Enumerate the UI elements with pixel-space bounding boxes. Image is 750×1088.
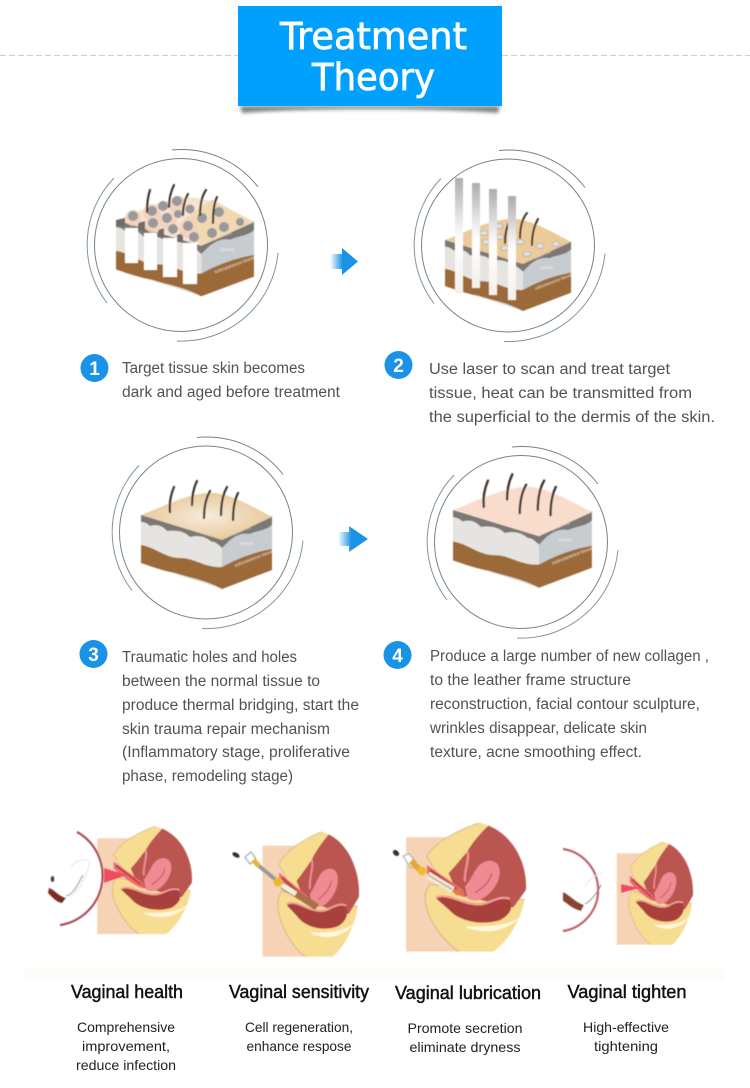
text: step 3 [122, 649, 359, 785]
icon: renewed skin block [453, 474, 594, 588]
illustration: vaginal tighten [563, 841, 694, 945]
badge: step 4: 4 [392, 646, 403, 667]
label: vaginal health: reduce infection [76, 1057, 176, 1073]
arrow: step 3 to step 4 [338, 526, 368, 552]
text: step 3: skin trauma repair mechanism [122, 721, 330, 738]
label: vaginal tighten [568, 982, 686, 1054]
panel: step 2 illustration [414, 150, 605, 342]
label: vaginal lubrication [395, 983, 541, 1055]
text: step 3: phase, remodeling stage) [122, 768, 293, 785]
badge: step 2 [384, 351, 412, 379]
label: vaginal health: improvement, [82, 1038, 170, 1054]
icon: skin block with laser beams [445, 178, 573, 311]
panel: step 4 illustration [427, 446, 618, 638]
title banner: Treatment [279, 15, 467, 58]
label: vaginal health [71, 982, 183, 1073]
text: step 1: dark and aged before treatment [122, 384, 341, 401]
text: step 2: the superficial to the dermis of the skin. [429, 409, 715, 426]
icon: magnifier lens [563, 849, 640, 931]
text: step 4: texture, acne smoothing effect. [430, 744, 642, 761]
label: vaginal health: Comprehensive [77, 1019, 175, 1035]
label: vaginal lubrication: Vaginal lubrication [395, 983, 541, 1003]
text: step 3: (Inflammatory stage, proliferative [122, 744, 350, 761]
illustration: vaginal sensitivity [231, 831, 361, 957]
text: step 4: reconstruction, facial contour sculpture, [430, 696, 700, 713]
text: step 3: produce thermal bridging, start the [122, 697, 359, 714]
label: vaginal lubrication: Promote secretion [408, 1020, 522, 1036]
label: vaginal health: Vaginal health [71, 982, 183, 1002]
badge: step 4 [384, 641, 412, 669]
icon: healing skin block [141, 481, 274, 589]
text: step 4: to the leather frame structure [430, 672, 631, 689]
text: step 2 [429, 361, 715, 426]
panel: step 3 illustration [112, 437, 303, 629]
icon: magnifier lens [48, 832, 127, 925]
label: vaginal sensitivity: enhance respose [246, 1038, 352, 1054]
label: vaginal sensitivity: Vaginal sensitivity [229, 982, 369, 1002]
label: vaginal tighten: High-effective [583, 1019, 669, 1035]
illustration: vaginal health [48, 826, 194, 935]
icon: treatment probe [392, 849, 462, 896]
icon: aged skin block with columns [116, 185, 256, 296]
arrow: step 1 to step 2 [330, 248, 358, 275]
text: step 2: tissue, heat can be transmitted from [429, 385, 692, 402]
text: step 4 [429, 648, 709, 761]
text: step 1 [122, 360, 341, 401]
label: vaginal lubrication: eliminate dryness [410, 1039, 520, 1055]
text: step 2: Use laser to scan and treat target [429, 361, 671, 378]
dashed header rule [0, 54, 750, 56]
label: vaginal sensitivity [229, 982, 369, 1054]
text: step 4: wrinkles disappear, delicate skin [429, 720, 647, 737]
text: step 1: Target tissue skin becomes [122, 360, 305, 377]
text: step 4: Produce a large number of new collagen , [430, 648, 709, 665]
label: vaginal sensitivity: Cell regeneration, [245, 1019, 353, 1035]
label: vaginal tighten: tightening [594, 1038, 658, 1054]
badge: step 3 [80, 640, 108, 668]
label: vaginal tighten: Vaginal tighten [568, 982, 686, 1002]
badge: step 1: 1 [89, 359, 100, 380]
text: step 3: between the normal tissue to [122, 673, 320, 690]
illustration: vaginal lubrication [392, 822, 528, 952]
badge: step 3: 3 [88, 645, 99, 666]
faint band behind labels [25, 967, 725, 981]
title banner: Theory [311, 56, 435, 99]
title banner [238, 6, 502, 113]
panel: step 1 illustration [87, 149, 278, 341]
badge: step 1 [80, 354, 108, 382]
text: step 3: Traumatic holes and holes [122, 649, 297, 666]
icon: treatment probe [231, 851, 317, 907]
badge: step 2: 2 [393, 356, 404, 377]
